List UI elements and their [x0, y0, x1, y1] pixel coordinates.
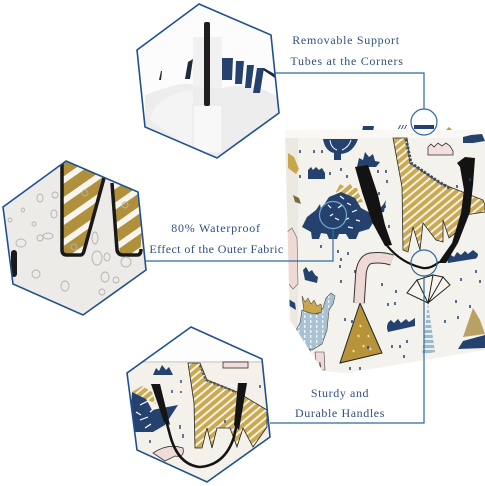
right mountain: [458, 308, 485, 349]
heading: durable handles: Durable Handles: [295, 406, 385, 420]
small blue dinosaur: [296, 293, 335, 371]
heading: removable support tubes: [290, 33, 404, 68]
fan palm tree: [407, 275, 450, 355]
callout line and circle: handles: [270, 250, 437, 423]
callout line and circle: waterproof: [146, 202, 346, 261]
tote handles: [355, 157, 475, 268]
pink cloud: [428, 143, 453, 155]
hexagon detail: sturdy handles: [126, 326, 271, 483]
navy cactus: [323, 139, 358, 160]
heading: waterproof fabric: [149, 221, 284, 256]
heading: removable support tubes: Removable Support: [292, 33, 400, 47]
navy clouds: [357, 152, 380, 167]
blue stegosaurus: [302, 182, 386, 239]
heading: waterproof fabric: Effect of the Outer Fabric: [149, 242, 284, 256]
navy stripes: [222, 58, 264, 93]
hexagon detail: waterproof fabric with droplets: [0, 155, 150, 320]
laundry hamper with dinosaur print: [285, 125, 485, 373]
hexagon detail: support tube at corner: [130, 0, 285, 160]
gold long-neck dinosaur: [393, 138, 485, 252]
heading: durable handles: [295, 386, 385, 420]
volcano: [340, 258, 392, 363]
water droplets: [8, 190, 131, 295]
gold side motif: [288, 153, 299, 174]
heading: durable handles: Sturdy and: [311, 386, 369, 400]
rim print fragments: [362, 125, 434, 132]
scattered dashes: [300, 150, 480, 370]
pink dinosaur on the side: [287, 228, 298, 289]
heading: removable support tubes: Tubes at the Corners: [290, 54, 404, 68]
callout line and circle: support tubes: [275, 73, 437, 135]
heading: waterproof fabric: 80% Waterproof: [171, 221, 261, 235]
